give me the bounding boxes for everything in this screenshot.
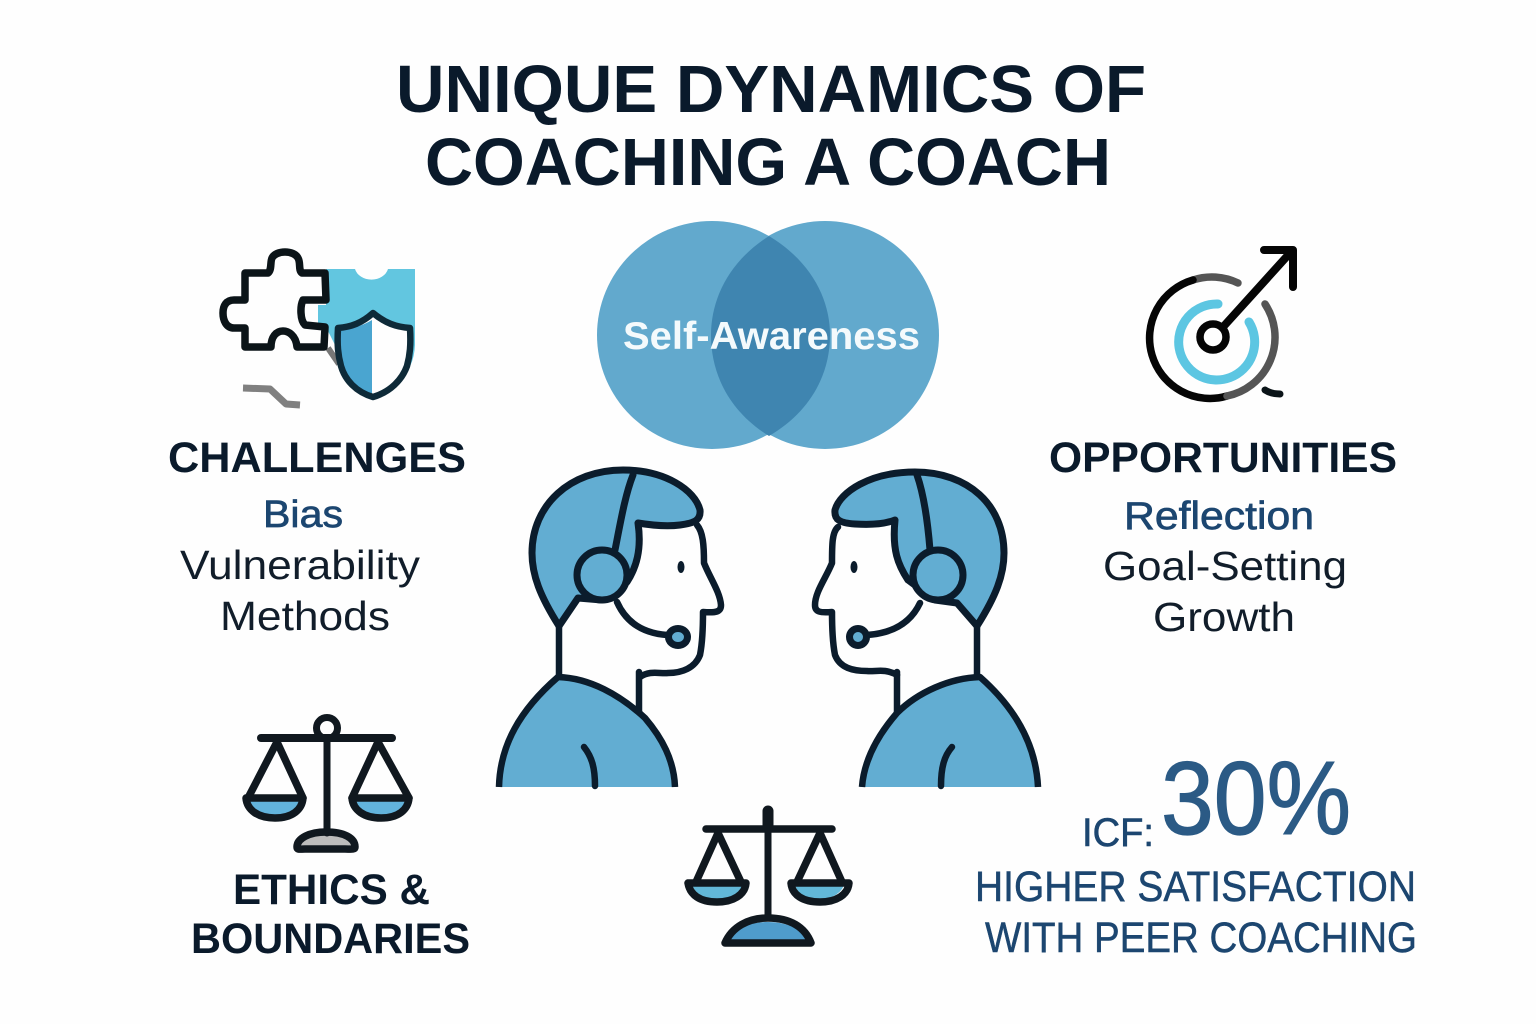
title: UNIQUE DYNAMICS OF: [396, 52, 1146, 127]
heading and list: opportunities: Growth: [1153, 594, 1295, 640]
heading and list: challenges: CHALLENGES: [168, 434, 466, 482]
stat callout: ICF 30%: HIGHER SATISFACTION: [975, 863, 1416, 911]
stat callout: ICF 30%: 30%: [1161, 741, 1351, 857]
title: [396, 52, 1146, 200]
heading and list: challenges: Methods: [220, 593, 390, 639]
heading and list: opportunities: OPPORTUNITIES: [1049, 434, 1397, 482]
icon: scales of justice, left: [246, 718, 409, 849]
icon: coach with headset, left: [499, 470, 721, 787]
stat callout: ICF 30%: [975, 741, 1417, 962]
icon: scales of justice, centre: [688, 811, 849, 943]
heading and list: opportunities: Reflection: [1124, 495, 1314, 538]
heading and list: challenges: [168, 434, 466, 639]
venn diagram: self-awareness: [597, 221, 939, 449]
heading and list: challenges: Bias: [263, 494, 343, 536]
venn diagram: self-awareness: Self-Awareness: [623, 315, 920, 358]
icon: coach with headset, right: [815, 472, 1038, 787]
heading and list: challenges: Vulnerability: [180, 542, 421, 588]
stat callout: ICF 30%: WITH PEER COACHING: [985, 914, 1417, 962]
heading and list: opportunities: Goal-Setting: [1103, 543, 1347, 589]
icon: puzzle and shield: [223, 252, 415, 405]
heading: ethics and boundaries: BOUNDARIES: [191, 915, 470, 963]
stat callout: ICF 30%: ICF:: [1082, 811, 1154, 855]
heading: ethics and boundaries: [191, 866, 470, 963]
icon: target with arrow: [1150, 250, 1293, 398]
title: COACHING A COACH: [425, 125, 1111, 200]
heading: ethics and boundaries: ETHICS &: [233, 866, 430, 914]
heading and list: opportunities: [1049, 434, 1397, 640]
